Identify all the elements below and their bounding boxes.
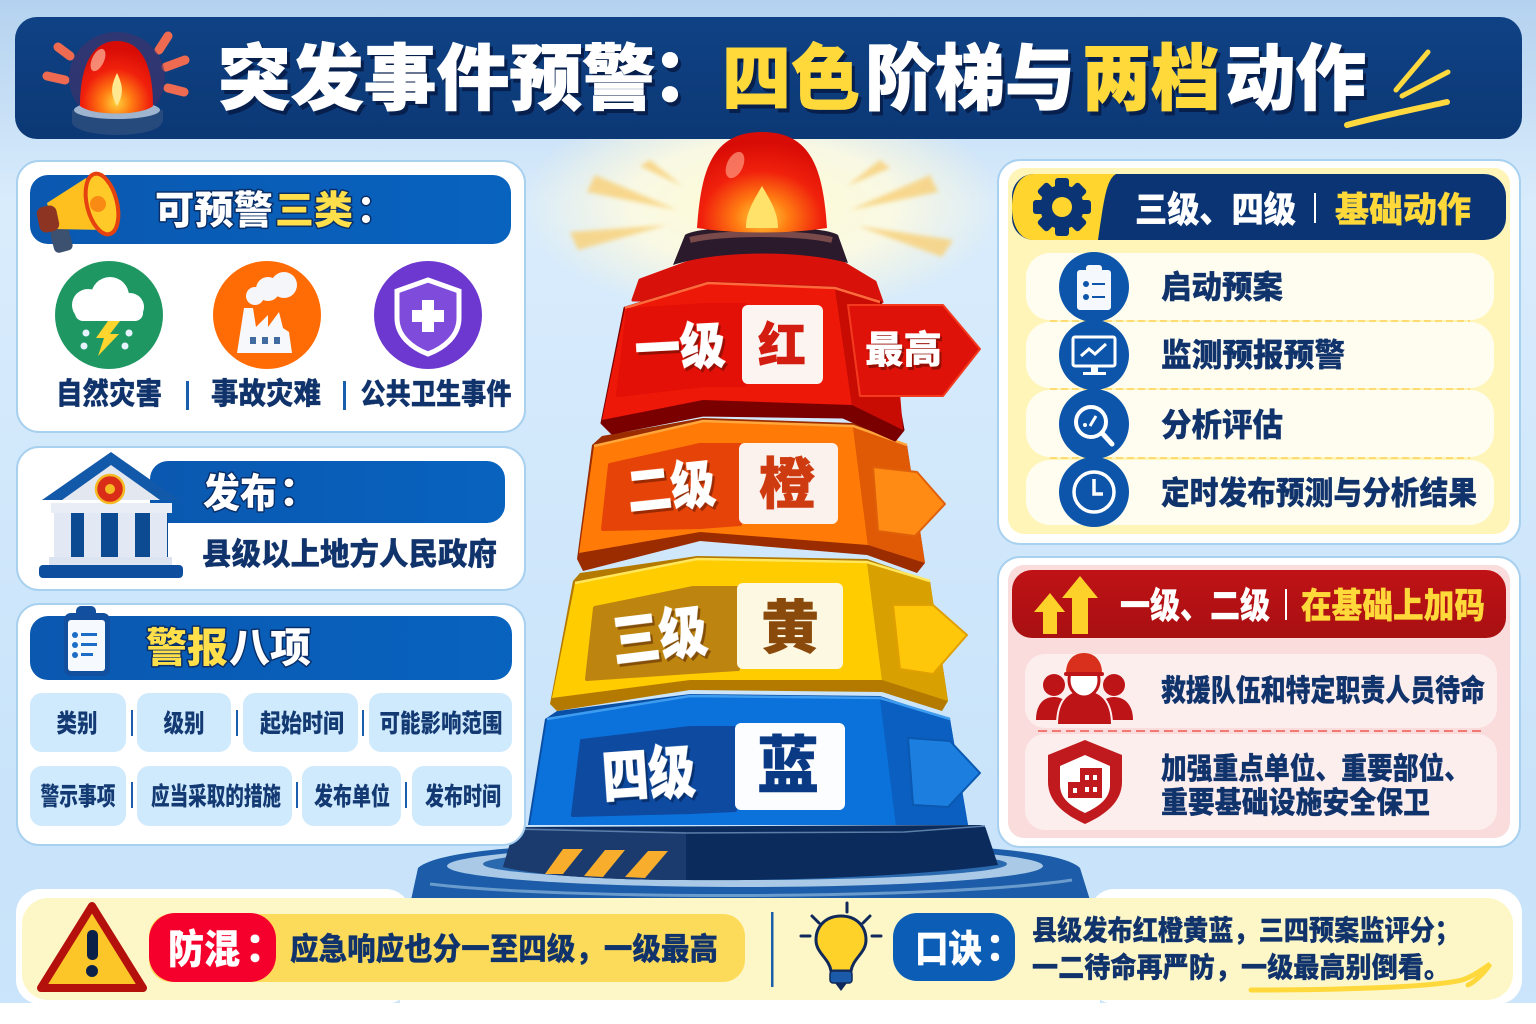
tier 4 blue: 蓝 [757,732,819,801]
action: security protection: 重要基础设施安全保卫 [1161,787,1430,820]
panel: eight alert items [17,604,525,845]
tier 2 orange [577,418,945,573]
title banner [15,17,1522,139]
title text [218,20,1366,125]
heading bar: 发布 [203,472,277,516]
tier 3 yellow: 黄 [761,596,819,661]
panel: basic actions for levels 3 and 4 [998,160,1520,544]
heading bar [30,616,512,680]
tier 2 orange: 橙 [759,453,815,516]
tier 1 red [602,255,980,440]
callout: do not confuse: 应急响应也分一至四级，一级最高 [290,932,718,967]
tier 3 yellow [550,556,967,711]
callout: mnemonic [893,913,1490,990]
heading bar: 在基础上加码 [1301,587,1485,626]
callout: mnemonic: 口诀 [915,929,982,971]
alert item chips [30,693,512,826]
callout: mnemonic: 县级发布红橙黄蓝，三四预案监评分； [1032,914,1460,946]
panel: extra actions for levels 1 and 2 [998,557,1520,847]
tier 2 orange: 二级 [624,456,718,522]
heading bar: 基础动作 [1335,191,1471,230]
title text: 动作 [1225,40,1366,120]
action rows [1026,253,1494,525]
heading bar: 可预警 [155,190,273,233]
icon: clipboard [64,606,110,676]
heading bar: 警报 [146,625,228,671]
tier 1 red: 红 [758,320,806,373]
callout: mnemonic: ： [976,918,1014,973]
tier 3 yellow: 三级 [608,600,710,674]
category: accident disaster: 事故灾难 [211,377,321,411]
icon: warning triangle [41,906,143,988]
heading bar: 三级、四级 [1135,189,1296,230]
category: public health [360,261,512,411]
icon: megaphone [36,170,124,254]
heading bar: ： [269,461,309,519]
panel: three warnable categories [17,161,525,432]
callout: do not confuse: ： [235,917,275,975]
heading bar [1012,570,1506,638]
beacon lamp [673,132,848,265]
action: security protection [1048,740,1470,824]
icon: government building [39,452,183,578]
tier 4 blue: 四级 [600,740,697,811]
alert item chips: 级别 [164,709,204,738]
action: monitoring [1059,320,1345,390]
title text: 阶梯与 [865,40,1075,120]
action: scheduled release [1059,457,1477,527]
panel: issuer [17,447,525,590]
category: accident disaster [211,261,321,411]
heading bar: 一级、二级 [1120,585,1270,626]
action: analysis [1059,389,1283,459]
icon: up arrows [1034,576,1098,634]
alert item chips: 发布单位 [314,782,390,811]
heading bar [1012,174,1506,240]
alert item chips: 发布时间 [425,782,501,811]
tier 1 red: 一级 [634,318,726,378]
alert item chips: 可能影响范围 [380,710,502,738]
tier 4 blue [528,694,980,825]
panel: issuer: 县级以上地方人民政府 [202,537,497,572]
icon: light bulb [801,903,881,991]
category: natural disaster [55,261,163,411]
title text: 四色 [722,40,860,120]
alert item chips: 警示事项 [40,783,116,811]
title text: ： [634,20,706,125]
icon: siren [47,32,185,135]
action: security protection: 加强重点单位、重要部位、 [1161,752,1470,786]
heading bar [150,461,505,523]
flourish [1347,52,1448,125]
action: start plan: 启动预案 [1161,269,1283,305]
flag: highest [848,305,980,396]
title text: 突发事件预警 [218,40,655,120]
action: rescue teams on standby [1036,653,1485,725]
action: monitoring: 监测预报预警 [1161,337,1345,373]
alert item chips: 应当采取的措施 [151,782,281,811]
platform [412,848,1090,898]
heading bar [30,175,511,244]
heading bar: ： [347,180,385,235]
heading bar: 三类 [275,190,353,233]
alert item chips: 类别 [56,710,98,738]
extra rows [1025,654,1497,830]
callout: mnemonic: 一二待命再严防，一级最高别倒看。 [1032,951,1450,983]
category: public health: 公共卫生事件 [360,378,512,411]
callout: do not confuse [149,913,745,982]
category: natural disaster: 自然灾害 [56,377,162,411]
action: analysis: 分析评估 [1161,407,1283,443]
glow and rays behind beacon [550,139,974,290]
action: start plan [1059,252,1283,322]
hazard stripes [545,849,668,878]
bottom strip [16,889,1522,1004]
alert item chips: 起始时间 [260,710,344,738]
icon: gear [1033,178,1091,236]
beacon tower [411,132,1090,900]
flag: highest: 最高 [865,330,942,372]
base [503,825,998,880]
action: scheduled release: 定时发布预测与分析结果 [1161,475,1477,511]
title text: 两档 [1082,40,1220,120]
callout: do not confuse: 防混 [168,928,240,972]
heading bar: 八项 [229,625,311,671]
